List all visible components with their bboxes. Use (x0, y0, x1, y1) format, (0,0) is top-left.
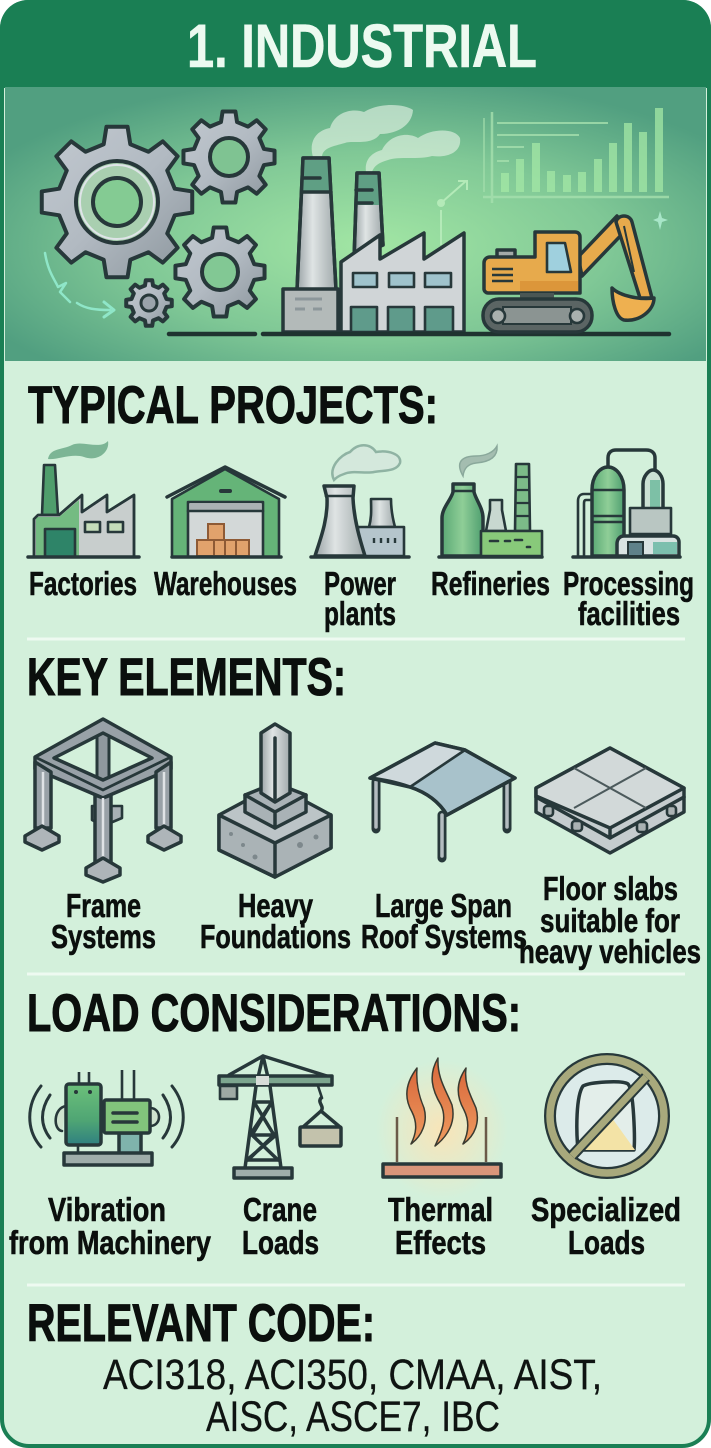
labels: Foundations (200, 918, 351, 955)
labels: Large Span (375, 887, 512, 924)
labels: plants (324, 595, 396, 632)
icon: specialized load prohibited (550, 1059, 664, 1173)
labels: Loads (568, 1224, 645, 1261)
labels: Effects (395, 1224, 486, 1261)
panel: key elements (25, 648, 701, 970)
labels: Vibration (48, 1191, 166, 1228)
icon: tower crane (219, 1056, 341, 1178)
labels: Warehouses (154, 565, 297, 602)
header band (0, 0, 711, 88)
labels: Frame (66, 887, 141, 924)
labels: Roof Systems (361, 918, 527, 955)
labels (29, 565, 694, 632)
labels: Heavy (238, 887, 313, 924)
icon: power plant (311, 445, 409, 557)
code list: ACI318, ACI350, CMAA, AIST, (103, 1351, 602, 1399)
icon: teal swoosh arrow (45, 253, 114, 317)
labels: Thermal (388, 1191, 493, 1228)
code list: AISC, ASCE7, IBC (206, 1393, 500, 1441)
icon: processing plant (573, 450, 680, 557)
labels (51, 870, 701, 970)
icon: small gear (126, 280, 172, 326)
heading: LOAD CONSIDERATIONS: (27, 984, 521, 1043)
icon: lower gear (175, 227, 265, 317)
icon: excavator (483, 216, 654, 332)
icon: large span roof (370, 743, 515, 858)
icon: floor slab (536, 748, 684, 853)
labels (9, 1191, 681, 1261)
icon: large gear (42, 127, 192, 277)
icon: factory (28, 441, 139, 557)
icon: thermal heat (376, 1058, 508, 1200)
icon: smoke clouds (312, 105, 460, 172)
labels: Systems (51, 918, 156, 955)
icon: upper gear (183, 111, 275, 203)
icon: vibrating machine (30, 1070, 183, 1165)
labels: Crane (243, 1191, 317, 1228)
heading: RELEVANT CODE: (27, 1294, 375, 1353)
code list (103, 1351, 602, 1441)
heading: TYPICAL PROJECTS: (28, 376, 438, 435)
icon: warehouse (167, 467, 285, 557)
icon: sparkle (653, 211, 668, 230)
icon: factory with chimneys (283, 158, 464, 332)
icon: rising arrow (438, 181, 467, 245)
labels: Loads (242, 1224, 319, 1261)
icon: refinery (439, 446, 542, 557)
heading: KEY ELEMENTS: (27, 648, 346, 707)
icon: heavy foundation (219, 724, 331, 877)
labels: Power (324, 565, 396, 602)
panel: load considerations (9, 984, 681, 1261)
labels: Specialized (531, 1191, 681, 1228)
labels: from Machinery (9, 1224, 212, 1261)
panel: relevant code (27, 1294, 602, 1441)
title: 1. INDUSTRIAL (187, 12, 537, 80)
labels: Factories (29, 565, 137, 602)
icon: frame system (25, 719, 181, 882)
labels: facilities (578, 595, 680, 632)
icon: ground line (169, 332, 669, 336)
panel: hero illustration (5, 87, 706, 361)
labels: Refineries (431, 565, 550, 602)
icon: growth bar chart (483, 108, 669, 203)
panel: typical projects (28, 376, 694, 632)
